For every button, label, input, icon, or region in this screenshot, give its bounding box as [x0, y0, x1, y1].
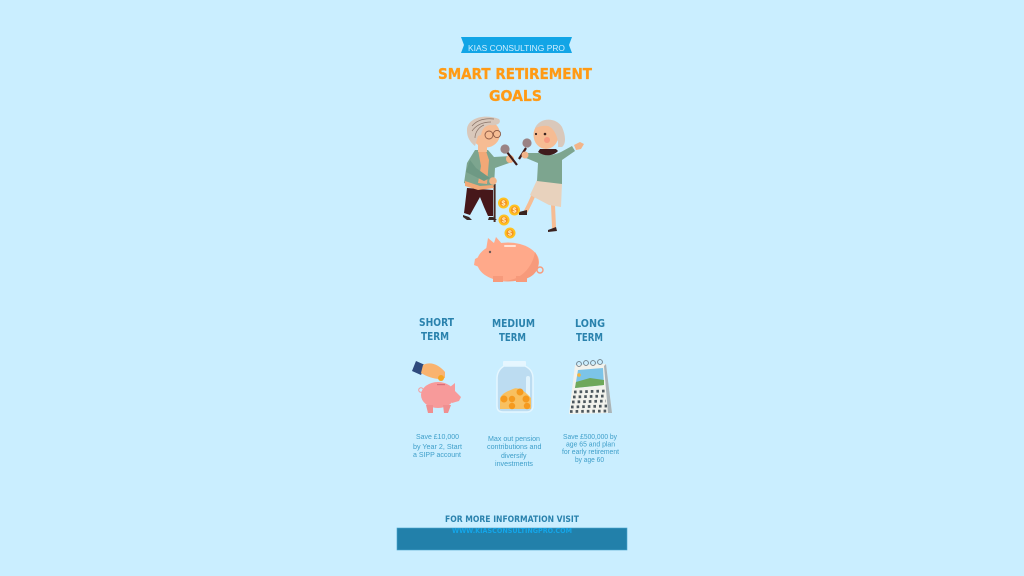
title: GOALS	[489, 87, 542, 105]
footer link: WWW.KIASCONSULTINGPRO.COM	[452, 527, 572, 535]
old man	[463, 117, 514, 222]
icon: jar of coins	[497, 361, 533, 412]
icon: large piggy bank	[474, 237, 543, 282]
banner: Kias Consulting Pro: KIAS CONSULTING PRO	[468, 44, 565, 53]
footer: more information	[397, 515, 627, 550]
text: long term goal: for early retirement	[562, 447, 619, 456]
text: medium term goal: diversify	[501, 451, 527, 460]
coins falling: $	[502, 218, 506, 224]
icon: hand dropping coin in pink piggy bank	[412, 361, 461, 413]
footer bar	[397, 528, 627, 550]
text: long term goal	[562, 432, 619, 464]
text: short term goal	[413, 432, 462, 459]
illustration: elderly couple singing	[463, 117, 584, 232]
title: SMART RETIREMENT	[438, 65, 592, 83]
text: long term goal: by age 60	[575, 455, 604, 464]
panel: medium term	[487, 317, 542, 468]
heading: long term	[575, 317, 605, 344]
heading: medium term: MEDIUM	[492, 317, 535, 330]
title	[438, 65, 592, 105]
text: medium term goal: investments	[495, 459, 533, 468]
heading: short term: TERM	[421, 330, 449, 343]
heading: long term: LONG	[575, 317, 605, 330]
panel: long term	[562, 317, 619, 464]
microphone pair	[500, 138, 532, 165]
coins falling: $	[513, 208, 517, 214]
text: short term goal: a SIPP account	[413, 450, 461, 459]
text: short term goal: Save £10,000	[416, 432, 459, 441]
heading: medium term	[492, 317, 535, 344]
heading: short term: SHORT	[419, 316, 454, 329]
text: long term goal: Save £500,000 by	[563, 432, 617, 441]
icon: wall calendar	[569, 360, 612, 414]
panel: short term	[412, 316, 462, 459]
footer heading: FOR MORE INFORMATION VISIT	[445, 515, 579, 525]
coins falling: $	[508, 230, 512, 238]
text: medium term goal: contributions and	[487, 442, 542, 451]
text: medium term goal: Max out pension	[488, 434, 540, 443]
heading: medium term: TERM	[499, 331, 526, 344]
coins falling: $	[502, 200, 506, 208]
text: short term goal: by Year 2, Start	[413, 442, 462, 451]
banner: Kias Consulting Pro	[461, 37, 572, 53]
text: long term goal: age 65 and plan	[566, 440, 615, 448]
coins falling	[498, 198, 520, 238]
text: medium term goal	[487, 434, 542, 468]
heading: short term	[419, 316, 454, 343]
heading: long term: TERM	[576, 331, 603, 344]
old woman	[519, 120, 584, 232]
